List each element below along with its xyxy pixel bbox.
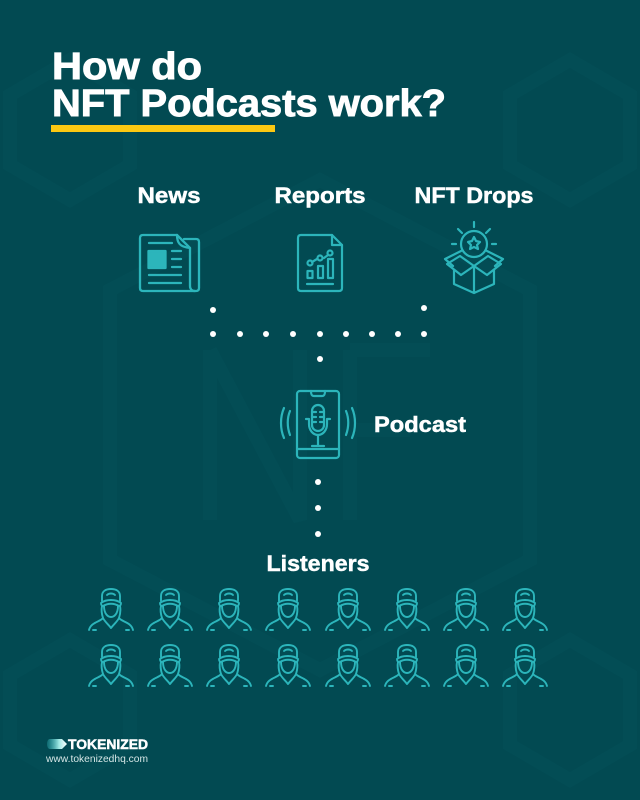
listeners grid bbox=[89, 589, 547, 686]
icon: open box with star bbox=[445, 222, 503, 293]
label: NFT Drops: NFT Drops bbox=[414, 183, 534, 208]
title: NFT Podcasts work? bbox=[52, 83, 446, 125]
icon: newspaper bbox=[140, 235, 199, 291]
title: How do bbox=[52, 46, 202, 88]
dotted connector: sources to podcast bbox=[210, 305, 427, 362]
label: Listeners: Listeners bbox=[266, 551, 370, 576]
icon: phone with microphone bbox=[281, 391, 355, 458]
icon: report with chart bbox=[298, 235, 342, 291]
label: Reports: Reports bbox=[274, 183, 366, 208]
dotted connector: podcast to listeners bbox=[315, 479, 321, 537]
title underline bbox=[51, 125, 275, 132]
label: News: News bbox=[138, 183, 200, 208]
label: Podcast: Podcast bbox=[374, 412, 467, 437]
logo mark bbox=[47, 739, 67, 749]
title bbox=[52, 46, 446, 125]
website url: www.tokenizedhq.com bbox=[45, 753, 148, 765]
logo wordmark: TOKENIZED bbox=[68, 736, 148, 752]
